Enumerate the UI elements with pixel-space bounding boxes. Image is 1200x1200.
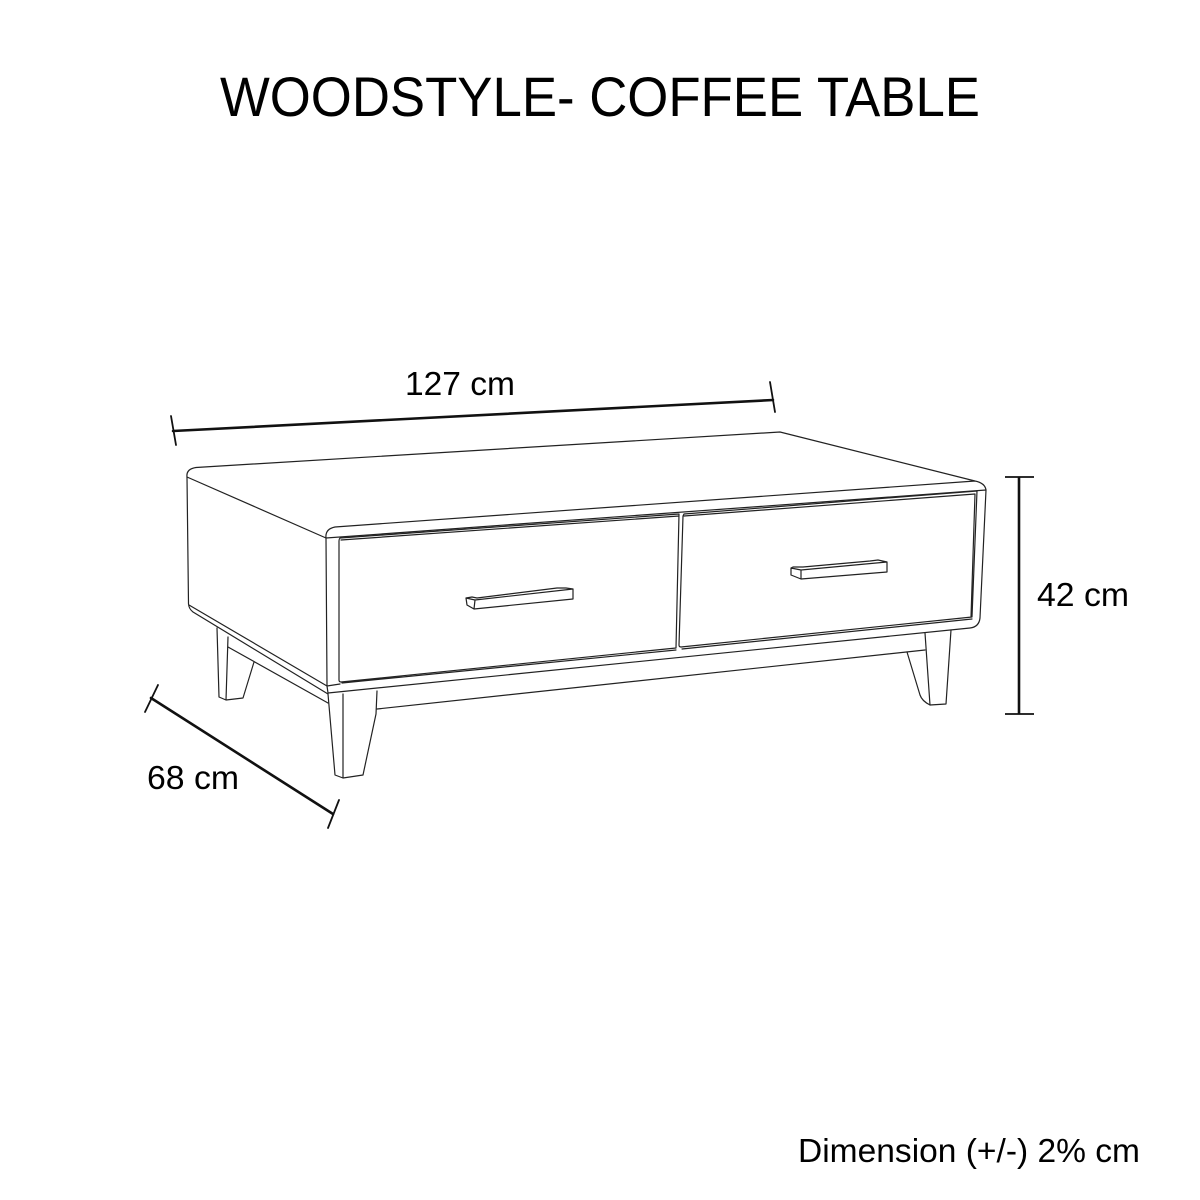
height label: 42 cm [1037,577,1129,614]
back left leg [217,628,254,700]
table top surface [187,432,986,538]
depth label: 68 cm [147,760,239,797]
height dimension line [1005,477,1034,714]
title: WOODSTYLE- COFFEE TABLE [220,65,980,128]
front left leg [328,691,377,778]
left drawer handle [466,588,573,609]
dimension tolerance note: Dimension (+/-) 2% cm [798,1133,1140,1170]
table front frame [326,490,986,693]
right back leg [907,652,930,705]
width dimension line [171,382,775,445]
depth dimension line [145,685,339,828]
right drawer handle [791,560,887,579]
width label: 127 cm [405,366,515,403]
left drawer [339,514,679,683]
coffee table line drawing [187,432,986,778]
right front leg [925,630,951,705]
table body side panel [187,477,328,694]
bottom front rail [377,650,925,709]
bottom side rail [228,647,328,703]
right drawer [679,491,977,649]
